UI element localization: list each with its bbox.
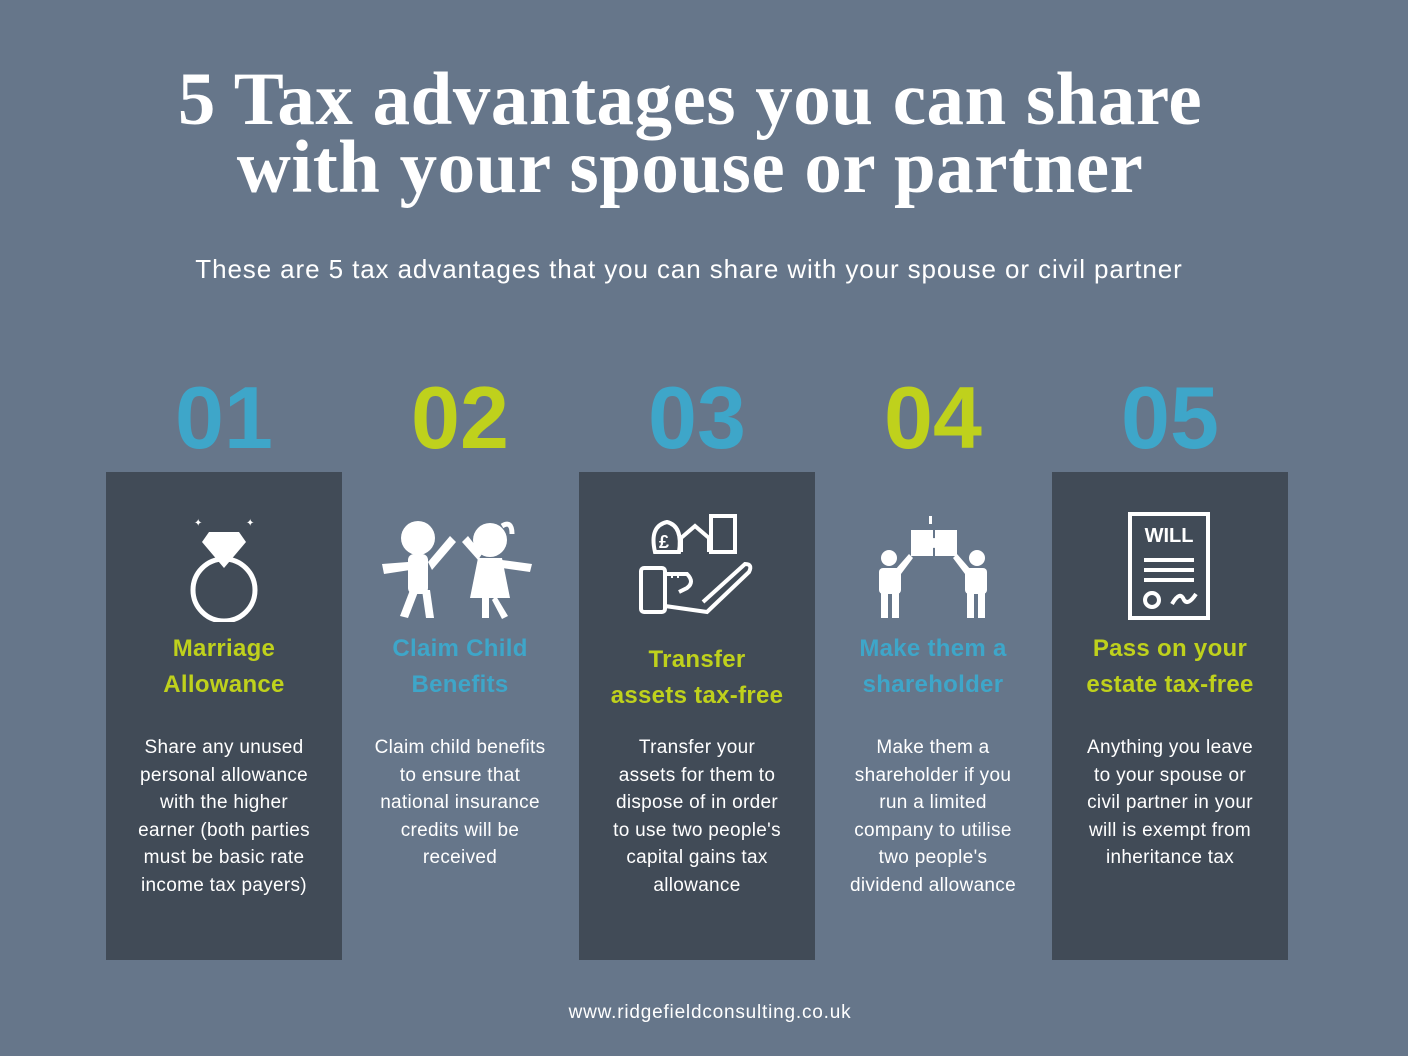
icon: assets in hand — [639, 514, 752, 614]
icon: ring: ✦ — [246, 518, 254, 529]
heading: Claim Child — [392, 635, 528, 662]
heading: Transfer — [648, 646, 746, 673]
heading: Make them a — [859, 635, 1007, 662]
icon: will document: WILL — [1145, 525, 1193, 547]
heading — [392, 635, 528, 698]
title: 5 Tax advantages you can share — [178, 58, 1202, 141]
title: with your spouse or partner — [237, 126, 1143, 209]
title — [178, 58, 1202, 209]
icon: ring — [190, 518, 258, 622]
heading — [611, 646, 783, 709]
panel: marriage allowance — [106, 472, 342, 960]
heading: estate tax-free — [1086, 671, 1254, 698]
body: Anything you leave to your spouse or civil partner in your will is exempt from inheritance tax — [1087, 737, 1253, 868]
panel: transfer assets — [579, 472, 815, 960]
number 05: 05 — [1121, 368, 1219, 467]
heading: Benefits — [411, 671, 509, 698]
body: Transfer your assets for them to dispose of in order to use two people's capital gains tax allowance — [613, 737, 781, 896]
body: Make them a shareholder if you run a limited company to utilise two people's dividend allowance — [850, 737, 1016, 896]
footer url: www.ridgefieldconsulting.co.uk — [569, 1002, 851, 1023]
icon: ring: ✦ — [194, 518, 202, 529]
subtitle: These are 5 tax advantages that you can share with your spouse or civil partner — [195, 254, 1183, 284]
icon: will document — [1128, 512, 1210, 620]
number 03: 03 — [648, 368, 746, 467]
body: Share any unused personal allowance with the higher earner (both parties must be basic rate income tax payers) — [138, 737, 310, 896]
heading: Marriage — [173, 635, 275, 662]
heading: assets tax-free — [611, 682, 783, 709]
number 02: 02 — [411, 368, 509, 467]
icon: children — [382, 521, 532, 619]
panel: child benefits — [375, 521, 545, 868]
heading — [1086, 635, 1254, 698]
icon: assets in hand: £ — [659, 532, 669, 552]
heading: Allowance — [163, 671, 285, 698]
number 04: 04 — [884, 368, 982, 467]
heading — [859, 635, 1007, 698]
heading — [163, 635, 285, 698]
icon: people with puzzle — [879, 516, 987, 618]
number 01: 01 — [175, 368, 273, 467]
heading: shareholder — [863, 671, 1003, 698]
panel: estate — [1052, 472, 1288, 960]
body: Claim child benefits to ensure that national insurance credits will be received — [375, 737, 545, 868]
heading: Pass on your — [1093, 635, 1247, 662]
panel: shareholder — [850, 516, 1016, 896]
